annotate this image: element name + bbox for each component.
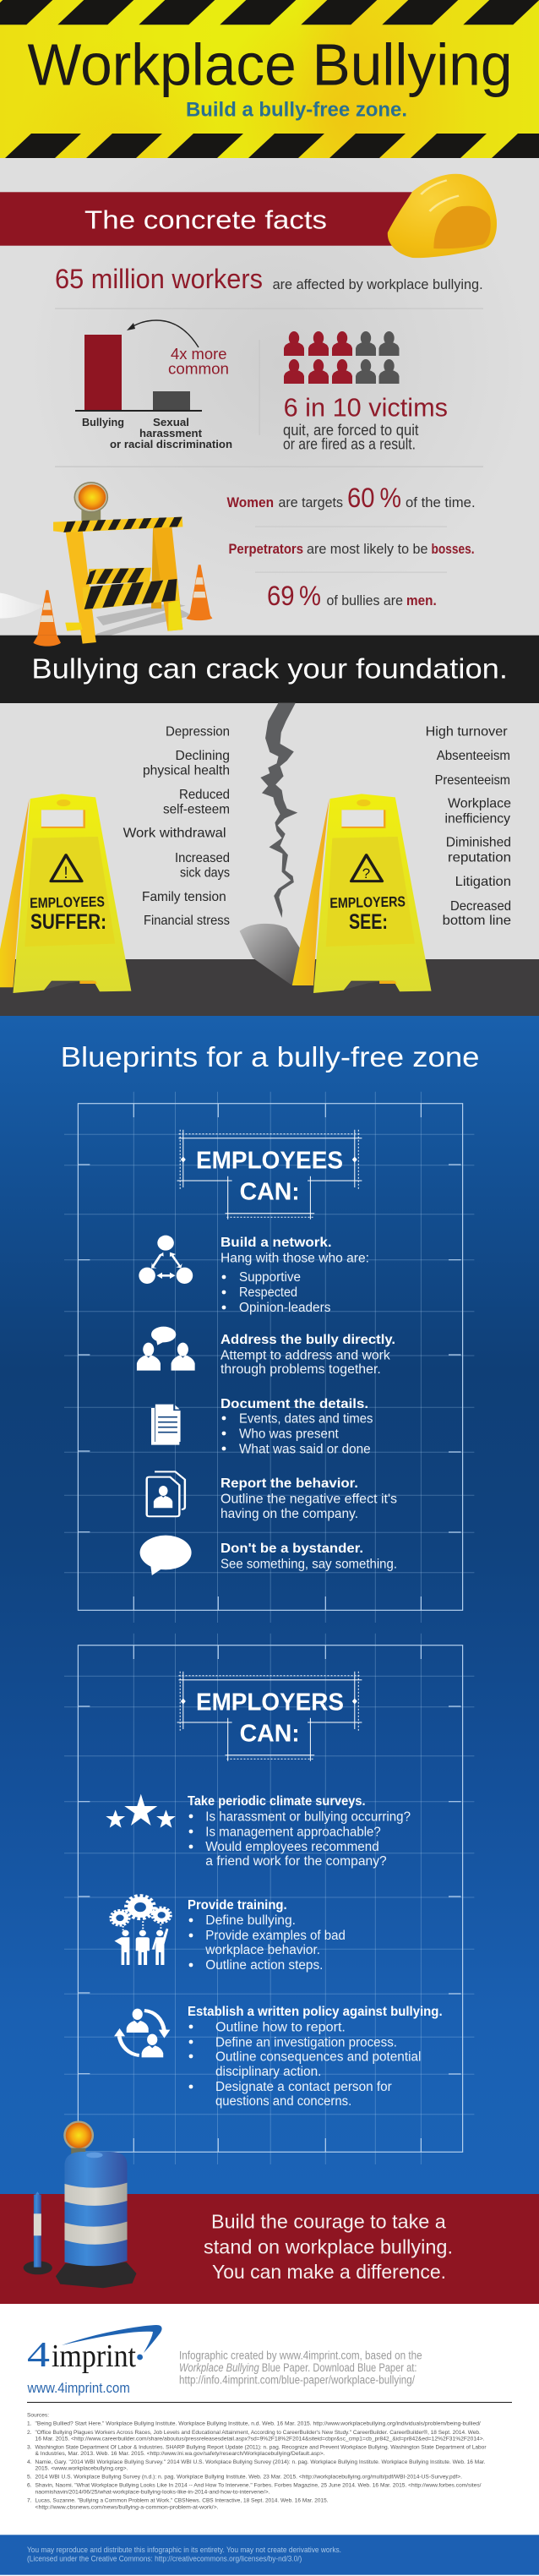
text: climate surveys: Is harassment or bullying occurring? xyxy=(205,1809,411,1824)
logo: 4imprint: imprint xyxy=(52,2339,136,2374)
bar chart: bullying vs harassment: Bullying xyxy=(82,416,124,428)
text: climate surveys xyxy=(188,1794,411,1869)
text block: sources: <http://www.cbsnews.com/news/bullying-a-common-problem-at-work/>. xyxy=(35,2505,219,2511)
text list: employer effects: Workplace xyxy=(448,797,511,811)
text: written policy: Designate a contact person for xyxy=(215,2080,392,2094)
panel: closing call to action: You can make a difference. xyxy=(212,2261,446,2283)
text: build a network xyxy=(220,1236,369,1315)
subtitle: Build a bully-free zone. xyxy=(186,99,407,122)
text block: sources: & Industries, Mar. 2013. Web. 16 Mar. 2015. <http://www.lni.wa.gov/safety/research/Workplacebullying/Default.asp>. xyxy=(35,2451,325,2457)
text block: sources: "Office Bullying Plagues Workers Across Races, Job Levels and Educational Attainment, According to CareerBuilder's New Study." CareerBuilder. CareerBuilder®, 18 Sept. 2014. Web. xyxy=(35,2429,481,2436)
text: build a network: Respected xyxy=(239,1285,297,1300)
illustration: traffic barrel and post xyxy=(24,2120,136,2288)
heading: employees can: EMPLOYEES xyxy=(196,1147,343,1174)
text: provide training: Define bullying. xyxy=(205,1913,296,1928)
text block: sources: 6. xyxy=(27,2483,32,2489)
text: address the bully: Address the bully directly. xyxy=(220,1333,395,1347)
text list: employer effects: Absenteeism xyxy=(437,749,510,763)
text list: employer effects: inefficiency xyxy=(444,811,510,826)
heading: employees can: CAN: xyxy=(240,1178,300,1205)
text list: employee effects: Family tension xyxy=(142,890,226,904)
text block: sources: 3. xyxy=(27,2445,32,2451)
text list: employee effects: Declining xyxy=(176,749,230,763)
sign: employers see: EMPLOYERS xyxy=(329,893,406,911)
text block: sources: 2014 WBI U.S. Workplace Bullying Survey (n.d.): n. pag. Workplace Bullying Institute. Web. 23 Mar. 2015. <http://workplacebullying.org/multi/pdf/WBI-2014-US-Survey.pdf>. xyxy=(35,2475,462,2480)
icon: network xyxy=(139,1236,193,1284)
icon: report with person xyxy=(147,1471,185,1516)
arrow: 4x more common xyxy=(127,320,229,378)
stat: perpetrators are bosses: bosses. xyxy=(431,542,475,557)
text list: employee effects: self-esteem xyxy=(163,803,230,817)
stat: 69% of bullies are men: % xyxy=(299,581,321,611)
text: don't be a bystander: Don't be a bystander. xyxy=(220,1542,363,1556)
panel: license footer xyxy=(0,2535,539,2575)
text: written policy: Outline how to report. xyxy=(215,2020,346,2034)
stat: perpetrators are bosses: Perpetrators xyxy=(228,542,303,557)
stat: 6 in 10 victims: 6 in 10 victims xyxy=(284,393,448,423)
text list: employee effects: Depression xyxy=(166,725,230,740)
arrow: 4x more common: 4x more xyxy=(171,346,226,363)
sign: employees suffer: EMPLOYEES xyxy=(30,893,105,911)
bar chart: bullying vs harassment xyxy=(75,335,232,450)
icon: three stars xyxy=(106,1794,176,1828)
text block: sources: 5. xyxy=(27,2475,32,2480)
text list: employer effects: Diminished xyxy=(446,836,511,850)
panel: license footer: (Licensed under the Creative Commons: http://creativecommons.org/licenses/by-nd/3.0/) xyxy=(27,2555,302,2564)
stat: women targets 60% xyxy=(226,483,476,513)
stat: women targets 60%: are targets xyxy=(279,495,343,510)
text: address the bully xyxy=(220,1333,395,1377)
stat: 65 million workers: 65 million workers xyxy=(55,264,263,294)
text: build a network: Build a network. xyxy=(220,1236,332,1250)
text: don't be a bystander xyxy=(220,1542,397,1571)
text: address the bully: through problems together. xyxy=(220,1362,381,1377)
stat: women targets 60%: % xyxy=(380,483,401,513)
text: provide training: Provide training. xyxy=(188,1898,287,1913)
text: provide training: workplace behavior. xyxy=(204,1943,320,1957)
stat: 65 million workers xyxy=(55,264,483,294)
text: document the details: Document the details. xyxy=(220,1397,368,1411)
text: don't be a bystander: See something, say something. xyxy=(220,1557,397,1571)
stat: 69% of bullies are men: 69 xyxy=(267,581,295,611)
panel: concrete facts heading band xyxy=(0,192,422,246)
panel: closing call to action: stand on workplace bullying. xyxy=(204,2236,453,2258)
sign: employers see xyxy=(292,794,432,993)
text: climate surveys: Would employees recommend xyxy=(205,1840,379,1854)
text: written policy: Outline consequences and potential xyxy=(215,2049,421,2064)
stat: 6 in 10 victims: quit, are forced to quit xyxy=(283,422,419,439)
stat: 69% of bullies are men: men. xyxy=(406,593,437,609)
text list: employee effects: Work withdrawal xyxy=(123,827,226,841)
text block: sources: Namie, Gary. "2014 WBI Workplace Bullying Survey." 2014 WBI U.S. Workplace Bullying Survey (2014): n. pag. Workplace Bullying Institute. Workplace Bullying Institute. Web. 16 Mar. xyxy=(35,2459,486,2465)
text list: employer effects: bottom line xyxy=(443,914,511,928)
stat: women targets 60%: 60 xyxy=(347,483,375,513)
panel: header caution banner xyxy=(0,0,539,158)
text block: sources: Washington State Department Of Labor & Industries. SHARP Bullying Report Update (2011): n. pag. Recognize and Prevent Workplace Bullying. Washington State Department of Labor xyxy=(35,2445,487,2451)
stat: perpetrators are bosses xyxy=(228,542,475,557)
text list: employer effects: Decreased xyxy=(450,899,511,914)
icon: document xyxy=(151,1405,181,1445)
icon: six in ten people pictogram xyxy=(284,331,399,384)
text: report the behavior: Outline the negative effect it's xyxy=(220,1492,397,1506)
text: build a network: Opinion-leaders xyxy=(239,1301,331,1315)
title: Workplace Bullying xyxy=(27,32,512,98)
text block: sources: 2. xyxy=(27,2430,32,2436)
text list: employee effects: sick days xyxy=(180,865,230,881)
text: document the details: Who was present xyxy=(239,1427,339,1441)
text block: sources: 2015. <www.workplacebullying.org>. xyxy=(35,2465,128,2471)
text block: sources: Lucas, Suzanne. "Bullying a Common Problem at Work." CBSNews. CBS Interactive, 18 Sept. 2014. Web. 16 Mar. 2015. xyxy=(35,2498,329,2504)
sign: employees suffer xyxy=(0,794,131,993)
text block: sources: 4. xyxy=(27,2459,32,2465)
text: written policy xyxy=(188,2005,443,2109)
panel: license footer: You may reproduce and distribute this infographic in its entirety. You may not create derivative works. xyxy=(27,2546,341,2555)
text list: employee effects: Financial stress xyxy=(144,914,230,928)
panel: employees can blueprint xyxy=(64,1092,474,1623)
panel: crack your foundation band: Bullying can crack your foundation. xyxy=(31,654,508,685)
text block: sources: "Being Bullied? Start Here." Workplace Bullying Institute. Workplace Bullying Institute, n.d. Web. 16 Mar. 2015. http://www.workplacebullying.org/individuals/problem/being-bullied/ xyxy=(35,2421,481,2427)
logo: 4imprint xyxy=(27,2325,162,2396)
stat: women targets 60%: of the time. xyxy=(406,495,476,510)
text: climate surveys: a friend work for the company? xyxy=(205,1854,387,1869)
text block: sources: Sources: xyxy=(27,2412,49,2418)
text list: employer effects: reputation xyxy=(448,850,511,865)
heading: employees can xyxy=(196,1147,343,1205)
text block: credit: Workplace Bullying Blue Paper. Download Blue Paper at: xyxy=(179,2361,417,2374)
text list: employee effects: physical health xyxy=(143,764,230,778)
text: address the bully: Attempt to address and work xyxy=(220,1348,390,1362)
text: report the behavior: Report the behavior. xyxy=(220,1476,358,1491)
text list: employer effects: Presenteeism xyxy=(435,773,510,788)
text: climate surveys: Take periodic climate surveys. xyxy=(188,1794,365,1809)
bar chart: bullying vs harassment: or racial discrimination xyxy=(110,438,232,450)
stat: perpetrators are bosses: are most likely to be xyxy=(307,542,427,557)
cone and barricade overlap onto band xyxy=(33,634,96,647)
text block: credit: Infographic created by www.4imprint.com, based on the xyxy=(179,2350,422,2362)
heading: the concrete facts: The concrete facts xyxy=(84,205,327,235)
text block: credit: http://info.4imprint.com/blue-paper/workplace-bullying/ xyxy=(179,2374,415,2387)
text: build a network: Supportive xyxy=(239,1270,301,1285)
text block: sources: 7. xyxy=(27,2498,32,2504)
text block: sources: 1. xyxy=(27,2421,32,2427)
text list: employee effects: Increased xyxy=(175,851,230,865)
stat: 65 million workers: are affected by workplace bullying. xyxy=(273,277,483,292)
text: climate surveys: Is management approachable? xyxy=(205,1825,381,1839)
text: provide training: Provide examples of bad xyxy=(205,1929,346,1943)
bar chart: bullying vs harassment: Sexual xyxy=(153,416,189,428)
text: document the details: Events, dates and times xyxy=(239,1411,373,1426)
sign: employers see: ? xyxy=(362,865,370,881)
sign: employees suffer: ! xyxy=(63,865,68,882)
text list: employer effects xyxy=(426,725,511,928)
text block: sources: 16 Mar. 2015. <http://www.careerbuilder.com/share/aboutus/pressreleasesdetail.aspx?sd=9%2F18%2F2014&siteid=cbpr&sc_cmp1=cb_pr842_&id=pr842&ed=12%2F31%2F2014>. xyxy=(35,2436,485,2442)
heading: employers can: CAN: xyxy=(240,1720,300,1747)
text: provide training: Outline action steps. xyxy=(205,1958,323,1973)
text: document the details xyxy=(220,1397,373,1456)
illustration: barricade and cones xyxy=(0,482,212,647)
stat: women targets 60%: Women xyxy=(226,495,274,510)
text block: sources xyxy=(27,2412,487,2511)
lamp xyxy=(74,482,108,521)
text: written policy: questions and concerns. xyxy=(215,2094,351,2109)
text block: sources: naomishavin/2014/06/25/what-workplace-bullying-looks-like-in-2014-and-how-to-intervene/>. xyxy=(35,2490,270,2496)
heading: employers can xyxy=(196,1689,344,1747)
logo: 4imprint: www.4imprint.com xyxy=(27,2380,130,2396)
panel: closing call to action xyxy=(0,2194,539,2304)
icon: hard hat xyxy=(388,174,497,258)
text list: employer effects: Litigation xyxy=(455,875,511,889)
text: report the behavior xyxy=(220,1476,397,1521)
stat: 69% of bullies are men: of bullies are xyxy=(326,593,403,609)
text: written policy: disciplinary action. xyxy=(215,2065,321,2079)
stat: 6 in 10 victims: or are fired as a result. xyxy=(283,436,416,453)
text: build a network: Hang with those who are: xyxy=(220,1251,369,1265)
heading: blueprints: Blueprints for a bully-free zone xyxy=(61,1041,479,1072)
icon: gears and trainees xyxy=(111,1896,171,1965)
illustration: wall crack xyxy=(240,703,302,985)
sign: employees suffer: SUFFER: xyxy=(30,910,106,934)
stat: 6 in 10 victims xyxy=(283,393,448,453)
panel: employers can blueprint xyxy=(64,1634,474,2164)
text block: credit xyxy=(179,2350,422,2387)
icon: two people talking xyxy=(137,1327,195,1371)
text list: employee effects xyxy=(123,725,230,928)
sign: employers see: SEE: xyxy=(349,910,388,934)
text block: sources: Shavin, Naomi. "What Workplace Bullying Looks Like In 2014 -- And How To Intervene." Forbes. Forbes Magazine, 25 June 2014. Web. 16 Mar. 2015. <http://www.forbes.com/sites/ xyxy=(35,2483,482,2489)
text list: employee effects: Reduced xyxy=(179,788,230,802)
text: written policy: Establish a written policy against bullying. xyxy=(188,2005,443,2019)
panel: crack your foundation band xyxy=(0,636,539,703)
stat: 69% of bullies are men xyxy=(267,581,437,611)
icon: speech bubble xyxy=(140,1536,192,1575)
heading: employers can: EMPLOYERS xyxy=(196,1689,344,1716)
text: written policy: Define an investigation process. xyxy=(215,2035,397,2049)
text: document the details: What was said or done xyxy=(239,1442,371,1456)
arrow: 4x more common: common xyxy=(168,361,229,378)
logo: 4imprint: 4 xyxy=(27,2336,50,2375)
cone right xyxy=(186,565,212,620)
icon: policy cycle with people xyxy=(114,2009,170,2057)
text: provide training xyxy=(188,1898,346,1973)
bar chart: bullying vs harassment: harassment xyxy=(139,427,203,439)
text: report the behavior: having on the company. xyxy=(220,1507,358,1521)
text list: employer effects: High turnover xyxy=(426,725,508,740)
panel: closing call to action: Build the courage to take a xyxy=(211,2211,446,2233)
cone left xyxy=(33,590,61,647)
